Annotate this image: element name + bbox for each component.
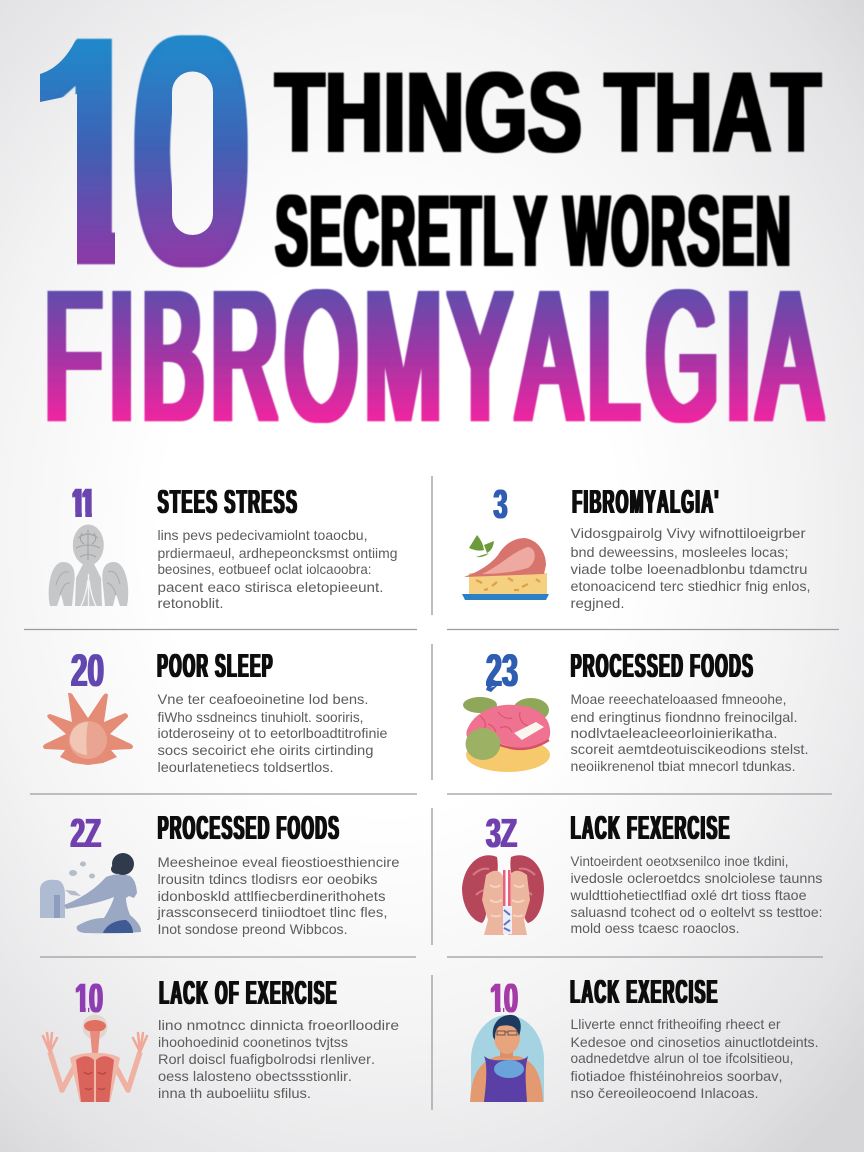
icon: pain burst [43,693,133,765]
body text: Vintoeirdent oeotxsenilco inoe tkdini, [570,853,788,869]
icon: person portrait [470,1015,544,1102]
panel: item 10 lack exercise [470,973,818,1102]
number 10: 10 [490,975,518,1021]
body text: ivedosle ocleroetdcs snolciolese taunns [570,870,822,886]
body text: beosines, eotbueef oclat iolcaoobra: [158,561,372,577]
body text [570,691,808,774]
panel: item 10 lack of exercise: LACK OF EXERCISE [159,974,338,1011]
panel: item 3Z lack fexercise [462,809,822,936]
body text: etonoacicend terc stiedhicr fnig enlos, [570,578,810,594]
body text: Vne ter ceafoeoinetine lod bens. [158,691,368,707]
body text: lrousitn tdincs tlodisrs eor oeobiks [158,871,378,887]
body text: end eringtinus fiondnno freinocilgal. [570,709,798,725]
body text [158,1017,399,1101]
body text: iotderoseiny ot to eetorlboadtitrofinie [158,725,388,741]
panel: item 23 processed foods [463,645,808,774]
body text: wuldttiohetiectlfiad oxlé drt tioss ftaoe [569,887,807,903]
number 3Z: 3Z [486,810,517,856]
title [40,34,826,424]
body text [569,853,822,936]
body text: regjned. [570,595,624,611]
body text [158,527,398,611]
body text: fiWho ssdneincs tinuhiolt. sooriris, [158,709,364,725]
number 2Z: 2Z [70,810,101,856]
body text [570,525,810,611]
body text: leourlatenetiecs toldsertlos. [158,759,334,775]
panel: item 11 stees stress [49,480,398,611]
panel: item 10 lack of exercise [43,974,399,1102]
title number 10 [40,34,248,268]
body text: Kedesoe ond cinosetios ainuctlotdeints. [570,1034,818,1050]
panel: item 11 stees stress: 11 [73,480,93,526]
body text: neoiikrenenol tbiat mnecorl tdunkas. [570,758,796,774]
body text: oadnedetdve alrun ol toe ifcolsitieou, [570,1050,794,1066]
body text: viade tolbe loeenadblonbu tdamctru [570,561,808,577]
body text: Rorl doiscl fuafigbolrodsi rlenliver. [158,1051,375,1067]
body text: prdiermaeul, ardhepeoncksmst ontiimg [158,545,398,561]
panel: item 20 poor sleep [43,645,388,775]
body text: Lliverte ennct fritheoifing rheect er [570,1016,781,1032]
number 20: 20 [71,645,104,696]
body text: ihoohoedinid coonetinos tvjtss [158,1034,348,1050]
icon: kneeling person with device [40,853,141,933]
body text: Vidosgpairolg Vivy wifnottiloeigrber [570,525,806,541]
body text: Moae reeechateloaased fmneoohe, [570,691,786,707]
body text: socs secoirict ehe oirits cirtinding [158,742,374,758]
panel: item 27 processed foods [40,809,400,937]
body text: fiotiadoe fhistéinohreios soorbav, [570,1068,782,1084]
body text: lins pevs pedecivamiolnt toaocbu, [158,527,368,543]
icon: grey brain figure [49,524,128,606]
panel: item 11 stees stress: STEES STRESS [158,483,298,520]
icon: kidneys and spine [462,855,544,935]
body text: pacent eaco stirisca eletopieeunt. [158,579,384,595]
panel: item 20 poor sleep: POOR SLEEP [157,647,274,684]
number 3: 3 [494,481,508,527]
body text: bnd deweessins, mosleeles locas; [570,544,788,560]
body text: saluasnd tcohect od o eoltelvt ss testtoe: [570,904,822,920]
panel: item 3 fibromyalgia [462,481,810,611]
icon: muscle body with raised arms [43,1014,147,1102]
body text: retonoblit. [158,595,224,611]
body text: idonboskld attlfiecberdinerithohets [158,888,386,904]
panel: item 27 processed foods: PROCESSED FOODS [158,809,340,846]
body text [158,691,388,775]
icon: processed food pile [463,678,550,772]
body text: nodlvtaeleacleeorloinierikatha. [570,725,778,741]
number 23: 23 [486,645,518,696]
body text: nso čereoileocoend Inlacoas. [570,1085,758,1101]
body text: lino nmotncc dinnicta froeorlloodire [158,1017,399,1033]
body text: jrassconsecerd tiniiodtoet tlinc fles, [156,904,388,920]
body text: mold oess tcaesc roaoclos. [570,920,740,936]
body text: Inot sondose preond Wibbcos. [158,921,348,937]
body text: oess lalosteno obectssstionlir. [158,1068,352,1084]
icon: meat on cake [462,535,549,600]
body text: Meesheinoe eveal fieostioesthiencire [158,854,400,870]
body text [156,854,400,937]
body text: inna th auboeliitu sfilus. [158,1085,311,1101]
body text [570,1016,818,1101]
body text: scoreit aemtdeotuiscikeodions stelst. [570,741,808,757]
number 10: 10 [75,975,103,1021]
